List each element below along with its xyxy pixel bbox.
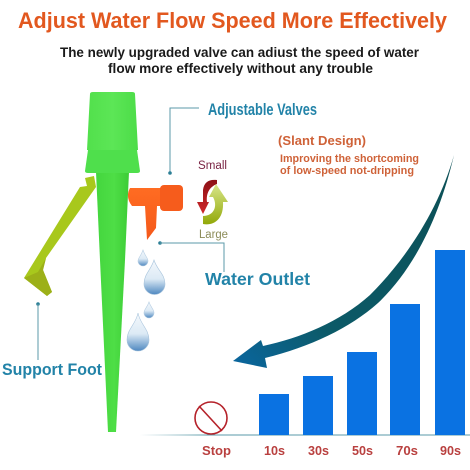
axis labels: [202, 444, 461, 458]
axis labels: 90s: [440, 444, 461, 458]
callout: support foot: Support Foot: [2, 360, 102, 379]
drop: large lower: [127, 313, 149, 351]
label: large: Large: [199, 229, 228, 241]
slant design note: Improving the shortcoming: [280, 153, 419, 165]
callout: support foot: [2, 302, 102, 379]
axis labels: Stop: [202, 444, 231, 458]
icon: orange valve: [128, 185, 183, 240]
curved arrow: [233, 155, 454, 368]
callout: adjustable valves: [168, 101, 317, 175]
bar: 50s: [347, 352, 377, 435]
axis labels: 30s: [308, 444, 329, 458]
axis labels: 70s: [396, 444, 418, 458]
callout: water outlet: Water Outlet: [205, 269, 310, 289]
water drops: [127, 250, 165, 351]
callout: water outlet: [158, 241, 310, 289]
icon: rotation arrows: [197, 180, 228, 224]
title: Adjust Water Flow Speed More Effectively: [18, 8, 448, 33]
label: small: Small: [198, 160, 227, 172]
drop: small top: [138, 250, 148, 266]
subtitle: flow more effectively without any trouble: [108, 60, 373, 76]
slant design note: of low-speed not-dripping: [280, 165, 414, 177]
bar: 90s: [435, 250, 465, 435]
slant design note: [278, 133, 419, 177]
bar chart: [140, 250, 470, 436]
subtitle: [60, 44, 420, 76]
bar: 10s: [259, 394, 289, 435]
axis labels: 10s: [264, 444, 285, 458]
bar: 30s: [303, 376, 333, 435]
drop: small lower: [144, 302, 154, 318]
icon: stop sign: [195, 402, 227, 434]
subtitle: The newly upgraded valve can adiust the speed of water: [60, 44, 420, 60]
slant design note: (Slant Design): [278, 133, 366, 148]
icon: green stake: [85, 92, 140, 432]
axis labels: 50s: [352, 444, 373, 458]
icon: support foot leg: [24, 176, 96, 296]
bar: 70s: [390, 304, 420, 435]
drop: large upper: [144, 260, 165, 294]
callout: adjustable valves: Adjustable Valves: [208, 101, 317, 119]
